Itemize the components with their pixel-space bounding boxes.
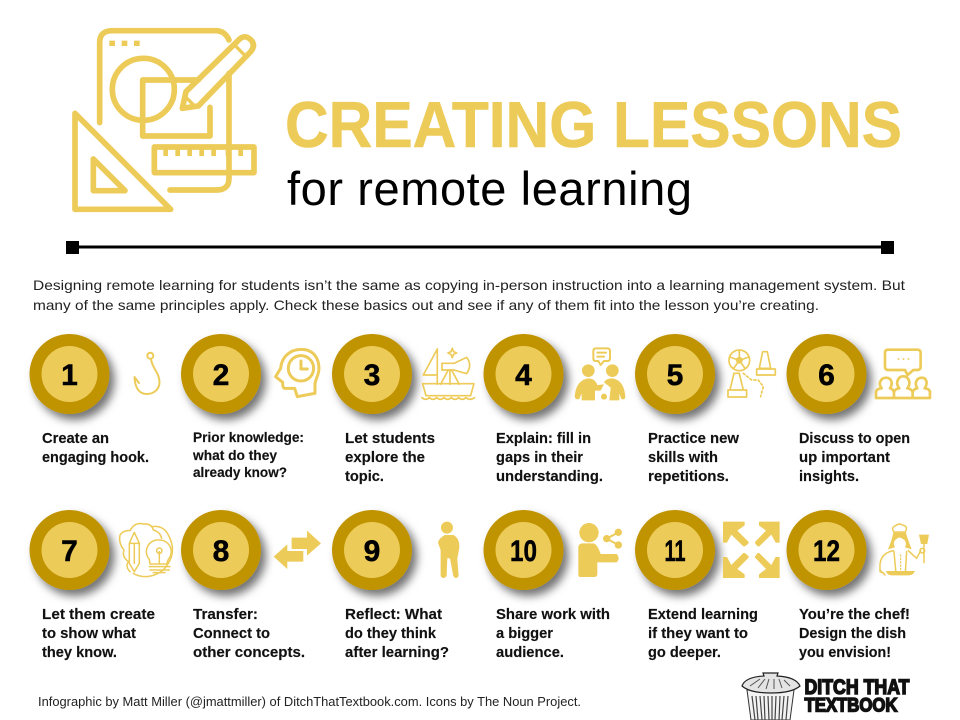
label 4 bbox=[496, 430, 603, 485]
label 11: if they want to bbox=[648, 625, 748, 642]
badge 6: 6 bbox=[818, 359, 835, 392]
label 12: You’re the chef! bbox=[799, 606, 910, 623]
label 5 bbox=[648, 430, 739, 485]
label 3: topic. bbox=[345, 468, 384, 485]
badge 5: 5 bbox=[667, 359, 683, 392]
logo wordmark bbox=[804, 676, 910, 716]
label 8: other concepts. bbox=[193, 644, 305, 661]
step 8 bbox=[181, 510, 321, 661]
badge 11: 11 bbox=[664, 535, 686, 568]
icon: expanding arrows bbox=[723, 522, 780, 578]
badge 7 bbox=[30, 510, 110, 590]
icon: two people talking bbox=[575, 348, 625, 400]
label 7 bbox=[42, 606, 155, 661]
badge 10: 10 bbox=[510, 535, 537, 568]
label 11: go deeper. bbox=[648, 644, 721, 661]
badge 1: 1 bbox=[61, 359, 78, 392]
label 12 bbox=[799, 606, 910, 661]
badge 7: 7 bbox=[61, 535, 78, 568]
label 4: Explain: fill in bbox=[496, 430, 591, 447]
title divider line bbox=[66, 241, 894, 254]
icon: ship with telescope bbox=[422, 348, 475, 399]
label 2: what do they bbox=[192, 448, 277, 463]
icon: group discussion bbox=[876, 350, 930, 398]
badge 8: 8 bbox=[213, 535, 229, 568]
step 1 bbox=[30, 334, 160, 466]
label 9: do they think bbox=[345, 625, 437, 642]
step 10 bbox=[484, 510, 622, 661]
logo: ditch that textbook bbox=[742, 673, 910, 720]
badge 3: 3 bbox=[364, 359, 380, 392]
intro text: many of the same principles apply. Check these basics out and see if any of them fit into the lesson you’re creating. bbox=[33, 297, 819, 313]
icon: head with clock bbox=[276, 349, 319, 397]
label 12: Design the dish bbox=[799, 625, 906, 642]
icon: brain, pencil and light bulb bbox=[120, 524, 172, 577]
label 11 bbox=[648, 606, 758, 661]
logo wordmark: DITCH THAT bbox=[804, 676, 910, 699]
badge 3 bbox=[332, 334, 412, 414]
badge 6 bbox=[786, 334, 866, 414]
label 6 bbox=[799, 430, 910, 485]
label 2 bbox=[192, 430, 304, 480]
heading: creating lessons: CREATING LESSONS bbox=[285, 88, 902, 161]
badge 11 bbox=[635, 510, 715, 590]
label 2: Prior knowledge: bbox=[193, 430, 304, 445]
label 7: to show what bbox=[42, 625, 136, 642]
badge 12 bbox=[786, 510, 866, 590]
footer credit: Infographic by Matt Miller (@jmattmiller) of DitchThatTextbook.com. Icons by The Noun Project. bbox=[38, 695, 581, 709]
step 9 bbox=[332, 510, 459, 661]
step 4 bbox=[484, 334, 625, 485]
label 10 bbox=[496, 606, 610, 661]
label 1: Create an bbox=[42, 430, 109, 447]
icon: transfer arrows bbox=[274, 531, 321, 569]
step 6 bbox=[786, 334, 930, 485]
label 5: skills with bbox=[648, 449, 718, 466]
icon: thinking person bbox=[438, 522, 459, 578]
badge 2 bbox=[181, 334, 261, 414]
label 9: after learning? bbox=[345, 644, 449, 661]
label 3: Let students bbox=[345, 430, 435, 447]
badge 9: 9 bbox=[364, 535, 380, 568]
badge 5 bbox=[635, 334, 715, 414]
logo wordmark: TEXTBOOK bbox=[804, 696, 898, 716]
icon: chef bbox=[880, 524, 929, 575]
label 9: Reflect: What bbox=[345, 606, 442, 623]
step 11 bbox=[635, 510, 780, 661]
label 10: Share work with bbox=[496, 606, 610, 623]
badge 8 bbox=[181, 510, 261, 590]
label 5: repetitions. bbox=[648, 468, 729, 485]
label 3: explore the bbox=[345, 449, 425, 466]
icon: geometry drawing tools bbox=[75, 31, 254, 209]
label 4: understanding. bbox=[496, 468, 603, 485]
icon: hook bbox=[134, 353, 160, 394]
label 8: Connect to bbox=[193, 625, 270, 642]
badge 10 bbox=[484, 510, 564, 590]
label 3 bbox=[345, 430, 435, 485]
intro text bbox=[33, 277, 905, 313]
label 7: Let them create bbox=[42, 606, 155, 623]
label 10: a bigger bbox=[496, 625, 553, 642]
title bbox=[285, 88, 902, 215]
badge 12: 12 bbox=[813, 535, 840, 568]
subheading: for remote learning: for remote learning bbox=[287, 162, 692, 215]
label 2: already know? bbox=[193, 465, 287, 480]
icon: soccer ball and cones bbox=[728, 350, 775, 397]
label 8: Transfer: bbox=[193, 606, 258, 623]
badge 4 bbox=[484, 334, 564, 414]
label 11: Extend learning bbox=[648, 606, 758, 623]
badge 9 bbox=[332, 510, 412, 590]
badge 2: 2 bbox=[213, 359, 229, 392]
step 2 bbox=[181, 334, 319, 480]
step 12 bbox=[786, 510, 929, 661]
step 3 bbox=[332, 334, 475, 485]
label 4: gaps in their bbox=[496, 449, 583, 466]
label 1: engaging hook. bbox=[42, 449, 149, 466]
intro text: Designing remote learning for students isn’t the same as copying in-person instruction into a learning management system. But bbox=[33, 277, 905, 293]
label 1 bbox=[42, 430, 149, 466]
label 12: you envision! bbox=[799, 644, 891, 661]
label 6: Discuss to open bbox=[799, 430, 910, 447]
label 6: insights. bbox=[799, 468, 859, 485]
label 5: Practice new bbox=[648, 430, 739, 447]
label 10: audience. bbox=[496, 644, 564, 661]
badge 4: 4 bbox=[515, 359, 532, 392]
label 6: up important bbox=[799, 449, 890, 466]
label 8 bbox=[193, 606, 305, 661]
label 9 bbox=[345, 606, 449, 661]
step 5 bbox=[635, 334, 775, 485]
icon: person sharing bbox=[578, 523, 622, 577]
icon: trash can bbox=[742, 673, 800, 720]
step 7 bbox=[30, 510, 172, 661]
label 7: they know. bbox=[42, 644, 117, 661]
